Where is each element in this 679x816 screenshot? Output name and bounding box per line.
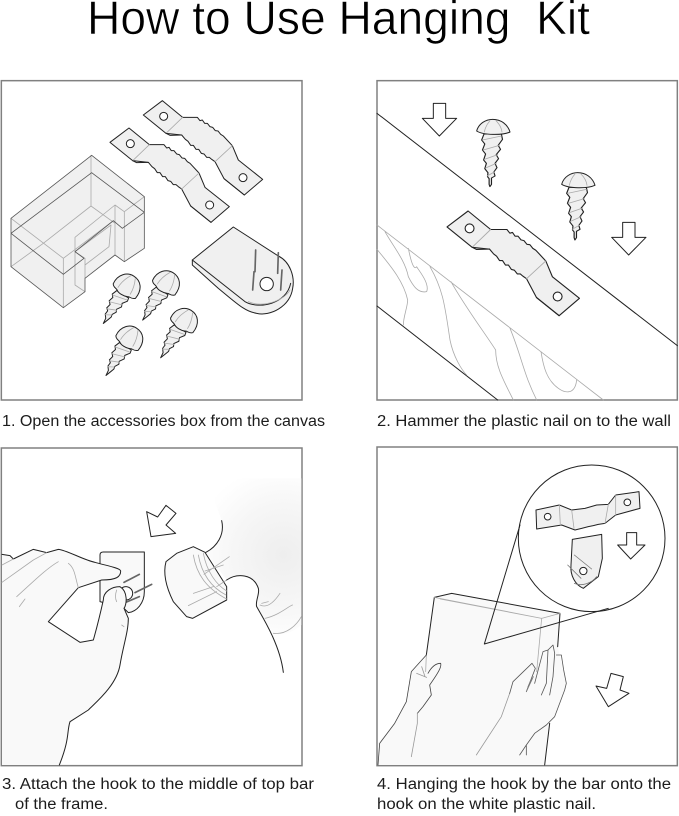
screw left — [477, 119, 510, 187]
panel: step 2 wall — [377, 81, 677, 400]
hook held in hand — [100, 552, 152, 613]
panel: step 1 accessories — [1, 81, 302, 400]
screw 4 — [95, 321, 148, 383]
hanging bracket front — [110, 128, 229, 222]
arm shadow — [206, 478, 301, 634]
screw 3 — [150, 303, 203, 365]
zoom callout circle — [484, 465, 665, 644]
canvas frame — [378, 593, 566, 765]
screw 2 — [132, 266, 185, 328]
panel: step 3 hands attach hook — [1, 448, 302, 766]
bracket on wall — [447, 211, 579, 316]
right hand pinching — [165, 521, 301, 672]
caption 1: 1. Open the accessories box from the canvas — [2, 413, 325, 430]
panel: step 4 hang canvas — [377, 447, 677, 766]
panel frame — [377, 81, 677, 400]
caption 3 — [2, 776, 314, 813]
caption 2: 2. Hammer the plastic nail on to the wall — [377, 413, 671, 430]
zoomed arrow — [618, 533, 645, 559]
zoomed bracket — [536, 492, 640, 530]
caption 4: 4. Hanging the hook by the bar onto the — [377, 776, 671, 793]
caption 3: of the frame. — [15, 796, 108, 813]
screw right — [562, 173, 595, 240]
left hand — [378, 655, 441, 765]
panel frame — [1, 81, 302, 400]
arrow right — [612, 222, 646, 255]
arrow lower right — [596, 673, 629, 707]
caption 3: 3. Attach the hook to the middle of top bar — [2, 776, 314, 793]
plastic hook — [192, 227, 293, 314]
wall and wood lines — [377, 113, 677, 400]
panel frame — [1, 448, 302, 766]
hanging bracket back — [143, 101, 263, 195]
zoomed hook — [568, 534, 602, 588]
right hand — [476, 645, 566, 755]
caption 4 — [377, 776, 671, 813]
left hand — [2, 549, 128, 765]
arrow — [147, 505, 176, 537]
screw 1 — [92, 269, 145, 331]
accessories box — [11, 155, 144, 308]
caption 4: hook on the white plastic nail. — [377, 796, 596, 813]
panel frame — [377, 447, 677, 766]
arrow left — [422, 103, 457, 136]
